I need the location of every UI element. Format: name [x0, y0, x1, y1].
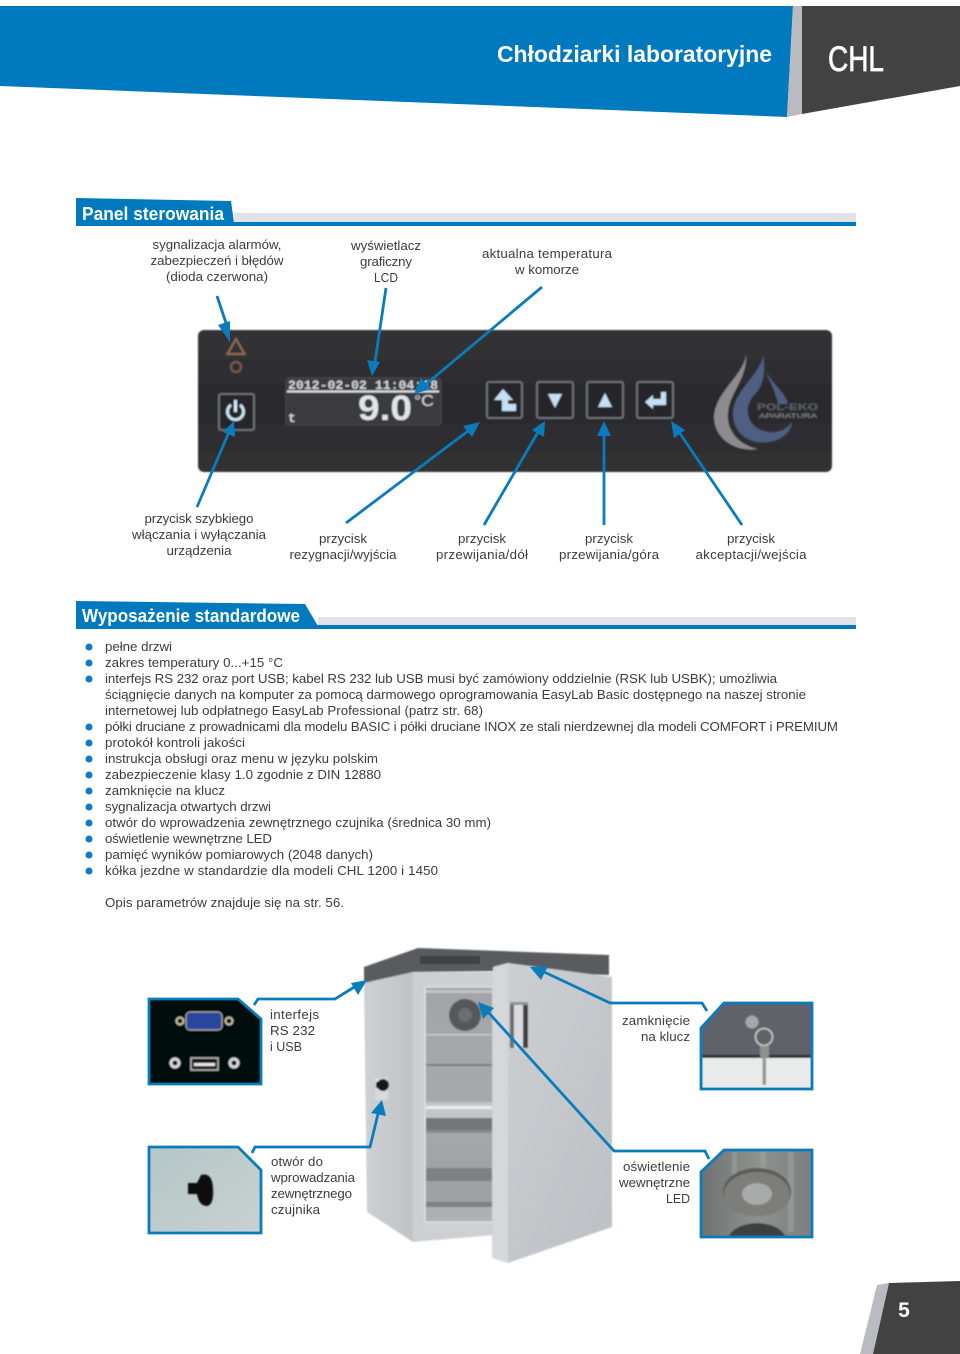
bullet list: standard equipment: otwór do wprowadzenia zewnętrznego czujnika (średnica 30 mm): [105, 815, 491, 830]
inset: RS 232 and USB ports: [149, 999, 261, 1084]
bullet list: standard equipment: sygnalizacja otwartych drzwi: [105, 799, 271, 814]
arrow: down: [484, 421, 545, 525]
bullet list: standard equipment: protokół kontroli jakości: [105, 735, 245, 750]
arrow: power: [197, 421, 235, 507]
label: power button: [131, 511, 267, 558]
label: scroll down button: przycisk: [458, 531, 506, 546]
arrow: back: [346, 422, 480, 523]
label: sensor port: czujnika: [271, 1202, 321, 1217]
label: sensor port: otwór do: [271, 1154, 323, 1169]
button: back: [487, 382, 522, 418]
label: interface: interfejs: [270, 1007, 319, 1022]
top control bar: [364, 948, 609, 983]
label: power button: urządzenia: [166, 543, 232, 558]
arrow: sensor port: [252, 1100, 386, 1153]
icon: door diode: [231, 362, 241, 372]
bullet list: standard equipment: pełne drzwi: [105, 639, 172, 654]
label: chamber temperature: [482, 246, 613, 277]
label: power button: włączania i wyłączania: [131, 527, 267, 542]
label: LED light: [618, 1159, 690, 1206]
label: alarm signalling: (dioda czerwona): [166, 269, 268, 284]
label: interface: [270, 1007, 319, 1054]
inset: sensor port: [149, 1147, 261, 1233]
label: scroll up button: przewijania/góra: [559, 547, 660, 562]
label: chamber temperature: aktualna temperatura: [482, 246, 613, 261]
bullet list: standard equipment: zakres temperatury 0...+15 °C: [105, 655, 283, 670]
label: chamber temperature: w komorze: [514, 262, 579, 277]
label: cancel button: [290, 531, 397, 562]
heading: Panel sterowania: [76, 198, 856, 226]
bullet list: standard equipment: półki druciane z prowadnicami dla modelu BASIC i półki druciane INOX ze stali nierdzewnej dla modeli COMFORT i PREMIUM: [105, 719, 838, 734]
arrow: enter: [671, 421, 742, 525]
label: LCD display: wyświetlacz: [350, 238, 421, 253]
bullet list: standard equipment: ściągnięcie danych na komputer za pomocą darmowego oprogramowania EasyLab Basic dostępnego na naszej stronie: [105, 687, 806, 702]
LCD screen: [286, 378, 441, 428]
arrow: alarm: [217, 296, 230, 342]
inset: key lock: [701, 1003, 812, 1089]
label: alarm signalling: zabezpieczeń i błędów: [150, 253, 284, 268]
label: interface: RS 232: [270, 1023, 315, 1038]
label: key lock: na klucz: [641, 1029, 690, 1044]
arrow: LED light: [478, 1002, 709, 1159]
header banner: [0, 6, 960, 117]
page number tab: [860, 1281, 960, 1354]
label: interface: i USB: [270, 1039, 302, 1054]
door: [492, 963, 612, 1263]
bullet list: standard equipment: kółka jezdne w standardzie dla modeli CHL 1200 i 1450: [105, 863, 438, 878]
logo: POL-EKO: APARATURA: [759, 414, 817, 420]
label: scroll down button: przewijania/dół: [436, 547, 528, 562]
fridge side wall: [364, 972, 413, 1242]
label: sensor port: zewnętrznego: [271, 1186, 352, 1201]
bullet list: standard equipment: internetowej lub odpłatnego EasyLab Professional (patrz str. 68): [105, 703, 483, 718]
heading: Panel sterowania: Panel sterowania: [82, 204, 225, 224]
inset: LED light: [701, 1150, 812, 1237]
door handle: [510, 1002, 528, 1048]
label: accept button: przycisk: [727, 531, 775, 546]
laboratory refrigerator photo: [364, 948, 612, 1263]
heading: Wyposażenie standardowe: [76, 601, 856, 629]
LCD screen: 9.0: [358, 389, 412, 428]
label: LCD display: [350, 238, 421, 285]
label: LCD display: graficzny: [360, 254, 412, 269]
button: power: [219, 394, 254, 430]
label: LCD display: LCD: [374, 270, 398, 285]
label: key lock: zamknięcie: [622, 1013, 690, 1028]
series code: CHL: [828, 40, 884, 79]
bullet list: standard equipment: zamknięcie na klucz: [105, 783, 225, 798]
arrow: key lock: [530, 966, 707, 1011]
arrow: temperature: [414, 287, 542, 394]
label: alarm signalling: [150, 237, 284, 284]
button: down: [537, 382, 573, 418]
arrow: LCD: [367, 288, 386, 376]
fridge front frame: [413, 972, 494, 1242]
bullet list: standard equipment: interfejs RS 232 oraz port USB; kabel RS 232 lub USB musi być zamówiony oddzielnie (RSK lub USBK); umożliwia: [105, 671, 778, 686]
label: accept button: [696, 531, 807, 562]
label: alarm signalling: sygnalizacja alarmów,: [152, 237, 282, 252]
label: LED light: wewnętrzne: [618, 1175, 690, 1190]
page number tab: 5: [898, 1299, 910, 1322]
label: power button: przycisk szybkiego: [144, 511, 254, 526]
label: scroll up button: przycisk: [585, 531, 633, 546]
bullet list: standard equipment: pamięć wyników pomiarowych (2048 danych): [105, 847, 373, 862]
heading: Wyposażenie standardowe: Wyposażenie standardowe: [82, 606, 300, 626]
bullet list: standard equipment: instrukcja obsługi oraz menu w języku polskim: [105, 751, 378, 766]
label: cancel button: przycisk: [319, 531, 367, 546]
chamber interior: [425, 987, 493, 1222]
logo: POL-EKO: POL-EKO: [757, 402, 818, 412]
label: accept button: akceptacji/wejścia: [696, 547, 807, 562]
LCD screen: t: [288, 411, 296, 426]
button: up: [587, 382, 623, 418]
label: scroll down button: [436, 531, 528, 562]
label: key lock: [622, 1013, 690, 1044]
panel icons on top bar: [420, 956, 480, 964]
button: enter: [637, 382, 673, 418]
label: sensor port: [270, 1154, 356, 1217]
bullet list: standard equipment: zabezpieczenie klasy 1.0 zgodnie z DIN 12880: [105, 767, 381, 782]
LCD screen: 2012-02-02 11:04:18: [288, 379, 438, 393]
arrow: interface: [254, 980, 367, 1005]
label: LED light: oświetlenie: [623, 1159, 690, 1174]
title: Chłodziarki laboratoryjne: [497, 41, 772, 67]
label: cancel button: rezygnacji/wyjścia: [290, 547, 397, 562]
control panel photo: [198, 330, 832, 472]
arrow: up: [597, 421, 611, 525]
label: scroll up button: [559, 531, 660, 562]
bullet list: standard equipment: oświetlenie wewnętrzne LED: [105, 831, 272, 846]
logo: POL-EKO: [714, 353, 818, 449]
sensor port knob: [375, 1078, 389, 1100]
icon: alarm triangle: [228, 339, 244, 354]
label: LED light: LED: [666, 1191, 690, 1206]
label: sensor port: wprowadzania: [270, 1170, 356, 1185]
LCD screen: °C: [414, 393, 434, 410]
bullet list: standard equipment: [86, 639, 838, 878]
note: parameters reference: Opis parametrów znajduje się na str. 56.: [105, 895, 344, 910]
